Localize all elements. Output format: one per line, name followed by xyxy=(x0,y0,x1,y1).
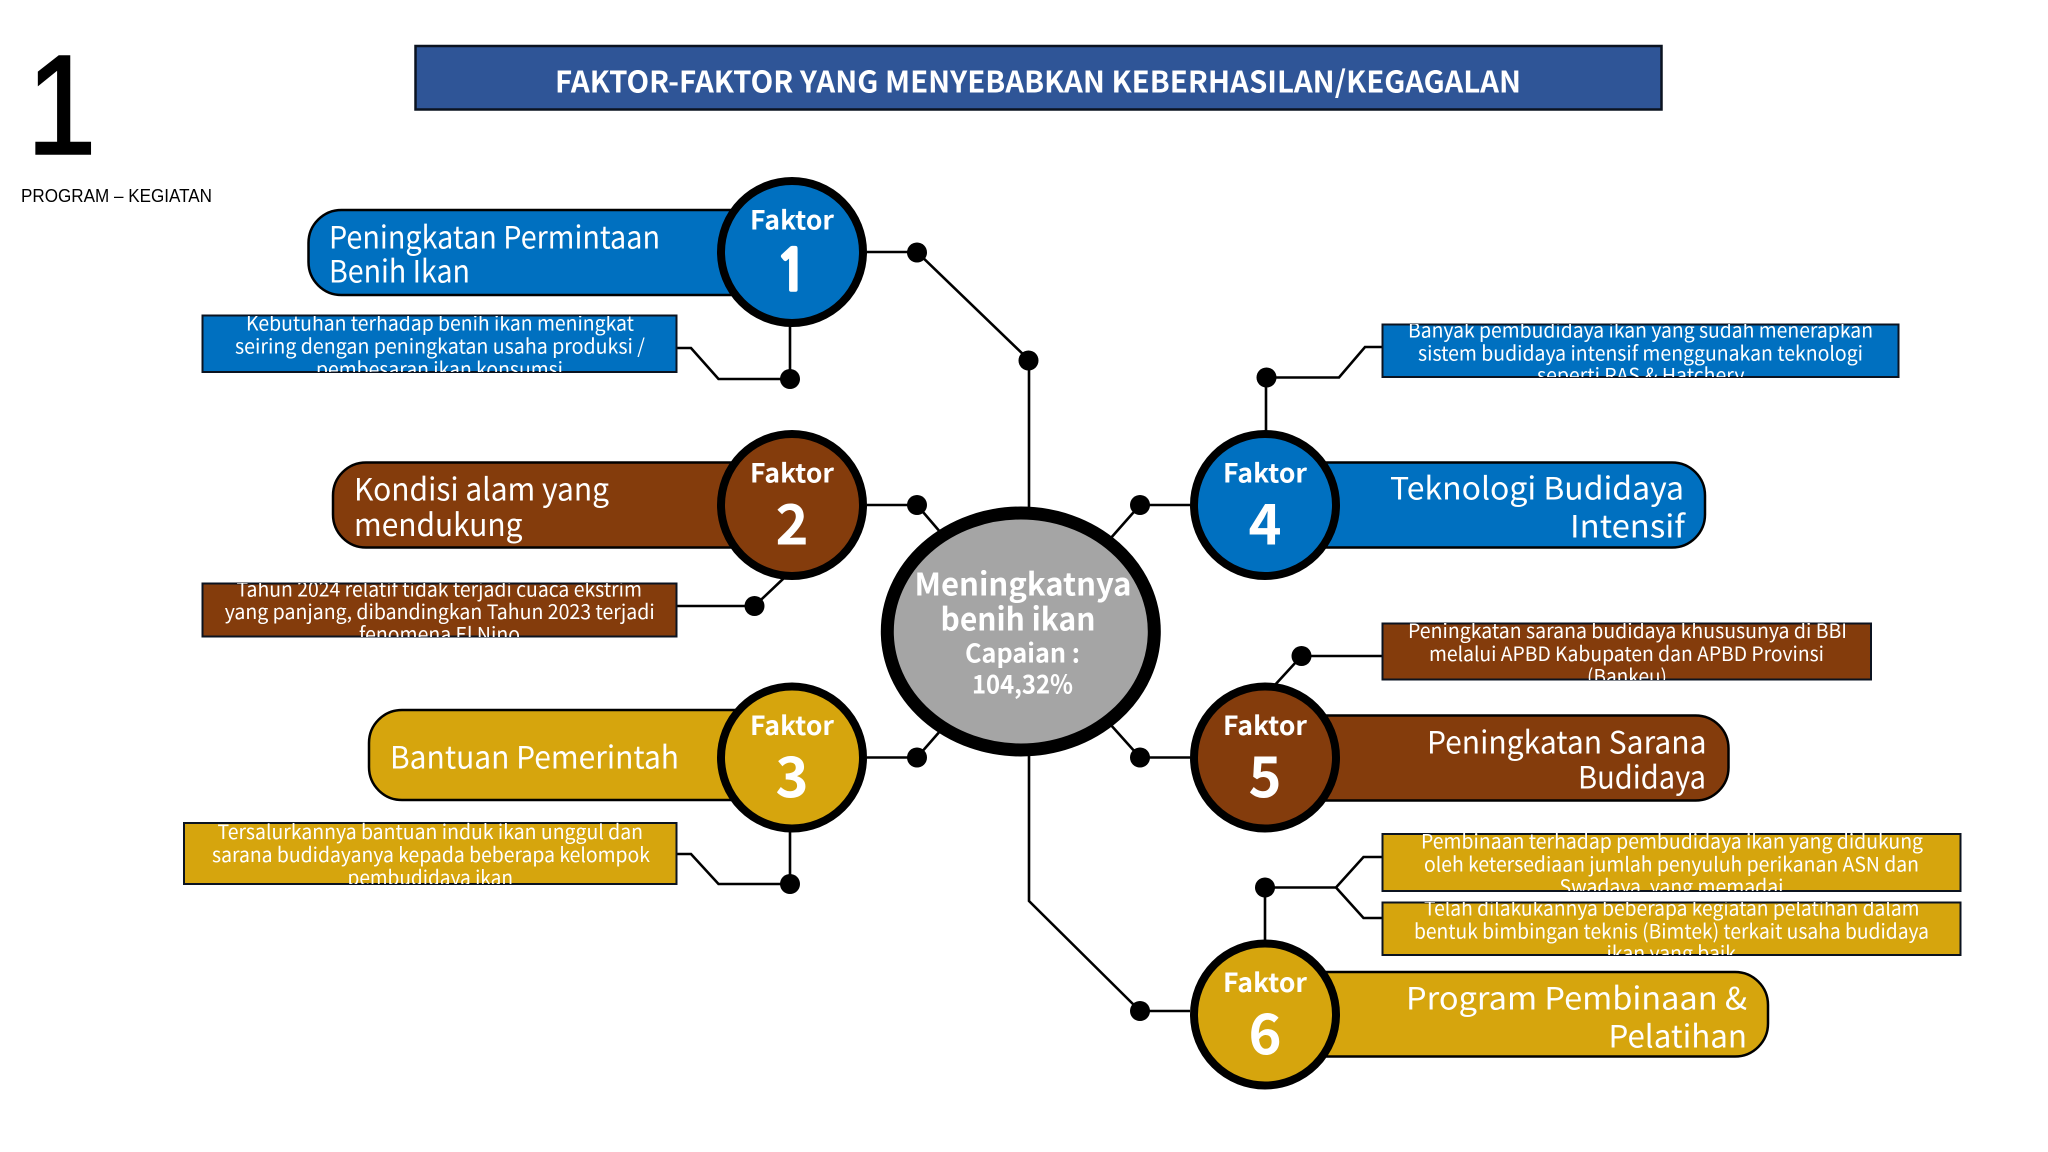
factor 2 group xyxy=(202,434,863,647)
factor 6 group xyxy=(1194,825,1960,1086)
factor 5 note: Peningkatan sarana budidaya khususunya di BBI xyxy=(1408,615,1847,644)
centre circle: result: Capaian : xyxy=(965,633,1080,670)
factor 3 badge: 3 xyxy=(775,733,809,814)
factor 4 note: sistem budidaya intensif menggunakan teknologi xyxy=(1418,337,1863,366)
factor 1 badge xyxy=(721,181,863,323)
factor 5 pill xyxy=(1265,716,1728,800)
factor 3 pill: Bantuan Pemerintah xyxy=(390,732,679,777)
connector: factor 1 to note xyxy=(677,325,790,379)
factor 6 pill xyxy=(1265,972,1768,1056)
factor 4 note: seperti RAS & Hatchery xyxy=(1537,359,1745,388)
connector dots xyxy=(744,242,1312,1021)
connector: factor 4 to centre xyxy=(1110,505,1190,539)
factor 3 note: Tersalurkannya bantuan induk ikan unggul dan xyxy=(218,816,643,845)
connector: factor 2 to note xyxy=(677,578,784,606)
title banner: FAKTOR-FAKTOR YANG MENYEBABKAN KEBERHASILAN/KEGAGALAN xyxy=(555,57,1521,101)
factor 4 badge: 4 xyxy=(1248,480,1282,561)
factor 2 pill: mendukung xyxy=(354,500,523,545)
connector: factor 5 to note xyxy=(1274,656,1382,686)
factor 1 badge: Faktor xyxy=(750,200,835,237)
factor 2 badge: 2 xyxy=(775,480,809,561)
title banner xyxy=(416,46,1662,110)
factor 6 note A: Pembinaan terhadap pembudidaya ikan yang didukung xyxy=(1421,825,1923,854)
factor 5 pill: Peningkatan Sarana xyxy=(1427,717,1706,762)
factor 6 badge: 6 xyxy=(1248,990,1282,1071)
factor 3 note: sarana budidayanya kepada beberapa kelompok xyxy=(212,839,650,868)
factor 5 badge: 5 xyxy=(1248,733,1282,814)
factor 5 note xyxy=(1382,622,1872,680)
factor 1 note: seiring dengan peningkatan usaha produksi / xyxy=(235,330,645,359)
factor 6 note A: Swadaya yang memadai xyxy=(1560,871,1784,900)
factor 1 pill: Benih Ikan xyxy=(329,246,470,291)
factor 1 note: pembesaran ikan konsumsi xyxy=(316,353,563,382)
connector: factor 5 to centre xyxy=(1110,724,1190,758)
program label: PROGRAM – KEGIATAN xyxy=(21,186,212,206)
factor 6 badge: Faktor xyxy=(1223,963,1308,1000)
connector: factor 6 to notes xyxy=(1265,857,1382,942)
factor 4 group xyxy=(1194,314,1898,576)
factor 6 note A xyxy=(1382,833,1962,892)
factor 5 badge: Faktor xyxy=(1223,706,1308,743)
factor 1 note: Kebutuhan terhadap benih ikan meningkat xyxy=(246,307,634,336)
factor 2 pill xyxy=(333,462,793,548)
factor 4 badge: Faktor xyxy=(1223,453,1308,490)
factor 6 pill: Program Pembinaan & xyxy=(1406,973,1747,1018)
factor 5 group xyxy=(1194,615,1871,828)
factor 1 note xyxy=(202,314,678,373)
centre circle: result: 104,32% xyxy=(972,664,1073,701)
factor 5 pill: Budidaya xyxy=(1578,752,1706,797)
factor 3 group xyxy=(184,686,863,891)
factor 2 note: Tahun 2024 relatif tidak terjadi cuaca ekstrim xyxy=(236,573,642,602)
factor 4 pill: Intensif xyxy=(1570,501,1687,546)
factor 4 note: Banyak pembudidaya ikan yang sudah menerapkan xyxy=(1408,314,1873,343)
factor 3 badge: Faktor xyxy=(750,706,835,743)
factor 2 note: fenomena El Nino xyxy=(359,618,520,647)
factor 5 note: (Bankeu) xyxy=(1587,660,1667,689)
factor 4 pill xyxy=(1265,462,1705,548)
factor 2 note: yang panjang, dibandingkan Tahun 2023 terjadi xyxy=(225,596,655,625)
factor 1 badge: 1 xyxy=(775,243,809,299)
factor 3 note: pembudidaya ikan xyxy=(348,862,513,891)
connector: factor 3 to note xyxy=(677,830,790,884)
factor 5 badge xyxy=(1194,686,1336,828)
factor 2 badge xyxy=(721,434,863,576)
factor 4 note xyxy=(1382,324,1900,378)
factor 1 pill: Peningkatan Permintaan xyxy=(329,212,660,257)
factor 3 pill xyxy=(369,710,793,800)
connector: factor 2 to centre xyxy=(867,505,941,533)
factor 6 note B xyxy=(1382,902,1962,956)
factor 2 note xyxy=(202,582,678,638)
factor 3 note xyxy=(183,822,678,885)
factor 1 pill xyxy=(308,210,788,295)
slide number: 1 xyxy=(27,26,96,184)
factor 4 badge xyxy=(1194,434,1336,576)
factor 3 badge xyxy=(721,686,863,828)
factor 2 pill: Kondisi alam yang xyxy=(354,464,609,509)
factor 2 badge: Faktor xyxy=(750,453,835,490)
factor 1 group xyxy=(202,181,863,382)
connector: factor 3 to centre xyxy=(867,730,941,758)
factor 6 note B: bentuk bimbingan teknis (Bimtek) terkait usaha budidaya xyxy=(1414,915,1929,944)
connector: factor 1 to centre xyxy=(867,252,1029,510)
factor 6 badge xyxy=(1194,944,1336,1086)
factor 5 note: melalui APBD Kabupaten dan APBD Provinsi xyxy=(1429,638,1824,667)
factor 6 pill: Pelatihan xyxy=(1608,1011,1747,1056)
centre circle: result: Meningkatnya xyxy=(914,559,1132,604)
factor 4 pill: Teknologi Budidaya xyxy=(1390,463,1684,508)
centre circle: result xyxy=(887,513,1154,750)
connector: factor 6 to centre xyxy=(1029,750,1190,1011)
factor 6 note A: oleh ketersediaan jumlah penyuluh perikanan ASN dan xyxy=(1424,848,1919,877)
factor 6 note B: Telah dilakukannya beberapa kegiatan pelatihan dalam xyxy=(1424,892,1920,921)
centre circle: result: benih ikan xyxy=(940,594,1096,639)
connector: factor 4 to note xyxy=(1266,347,1382,432)
factor 6 note B: ikan yang baik xyxy=(1606,937,1736,966)
